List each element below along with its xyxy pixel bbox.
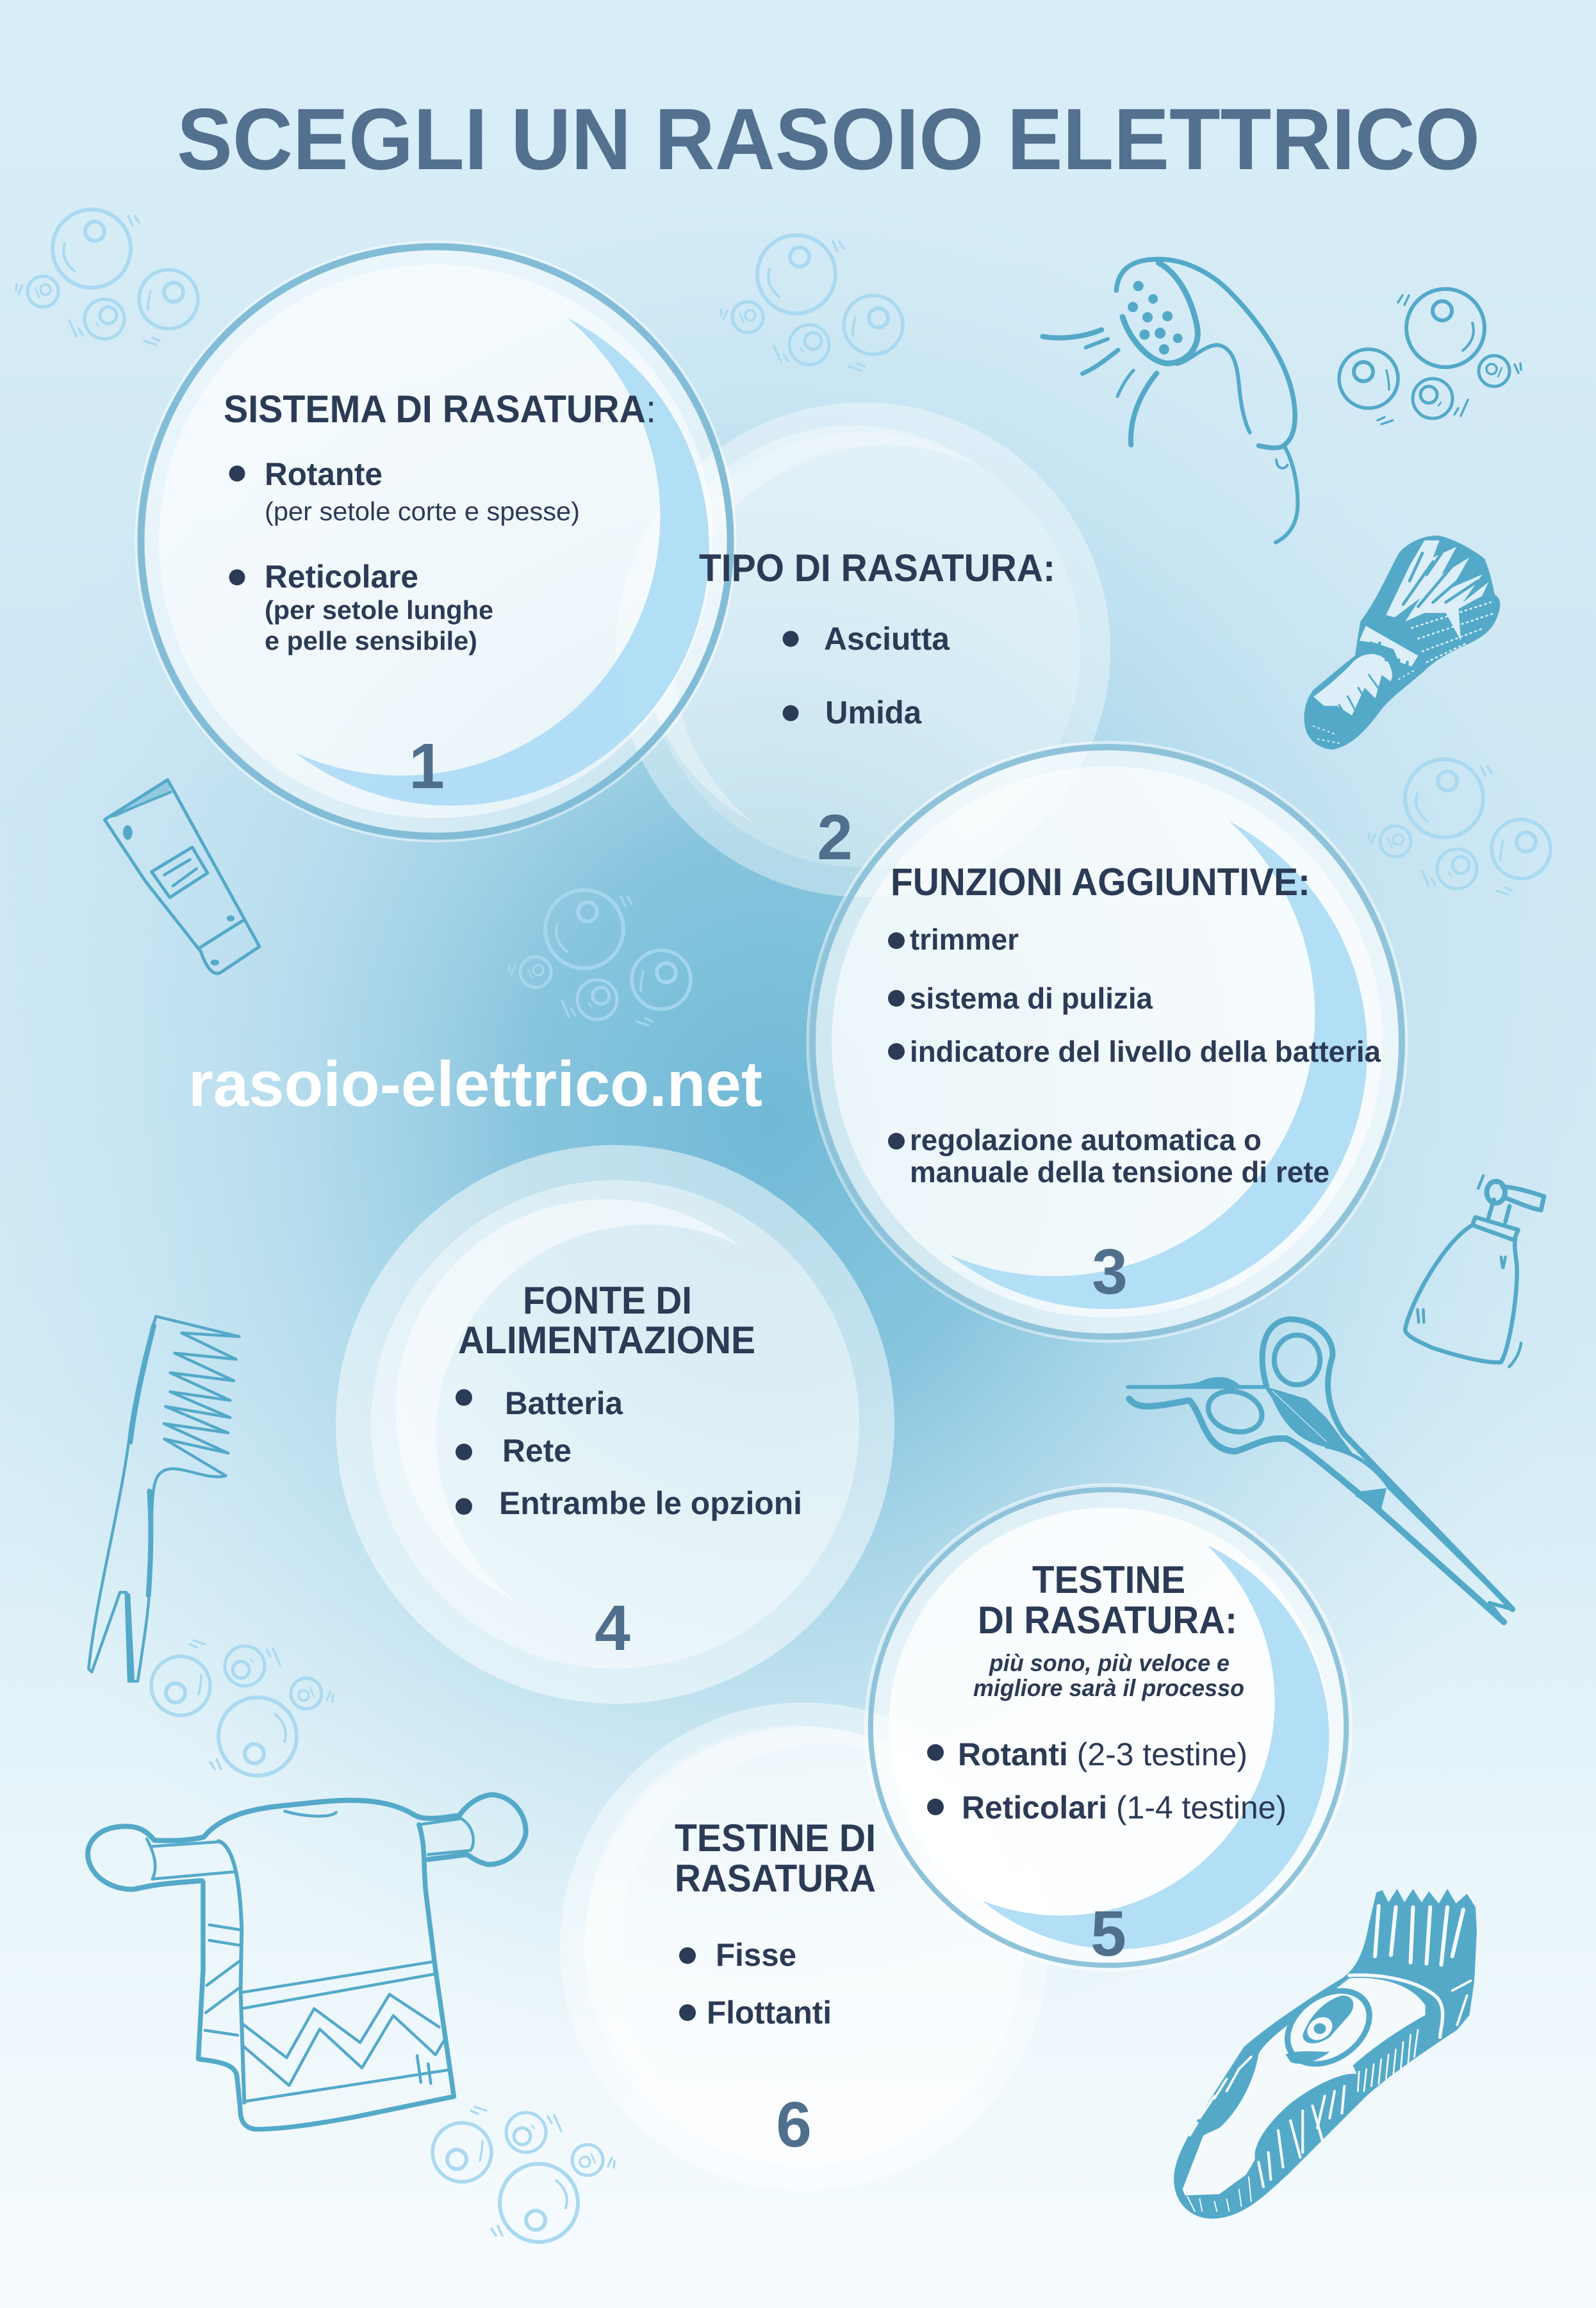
panel 2 text: Asciutta	[824, 621, 950, 657]
panel 1 text: 1	[409, 730, 445, 802]
panel 6 text: 6	[776, 2089, 812, 2161]
panel 3 text: FUNZIONI AGGIUNTIVE:	[891, 861, 1310, 903]
panel 5 text: Reticolari (1-4 testine)	[962, 1790, 1287, 1826]
panel 2 text: 2	[817, 802, 853, 873]
panel 1 text: e pelle sensibile)	[265, 626, 477, 655]
bubble panel 6	[560, 1702, 1048, 2191]
panel 5 text: DI RASATURA:	[978, 1599, 1237, 1642]
panel 1 text: SISTEMA DI RASATURA:	[224, 388, 656, 431]
panel 5 text: più sono, più veloce e	[989, 1650, 1230, 1676]
panel 6 text: TESTINE DI	[675, 1817, 876, 1859]
panel 4 text	[456, 1279, 802, 1664]
icon: soap dispenser	[1405, 1176, 1544, 1367]
icon: bubbles top right	[1339, 289, 1521, 424]
bubble panel 2	[616, 402, 1110, 897]
bubble panel 4	[336, 1145, 894, 1704]
panel 3 text: manuale della tensione di rete	[910, 1155, 1329, 1189]
icon: comb	[88, 1316, 239, 1681]
panel 1 text	[224, 388, 656, 802]
bubble panel 3	[807, 742, 1407, 1342]
panel 4 text: Rete	[502, 1433, 572, 1469]
panel 1 text: (per setole lunghe	[265, 595, 493, 625]
panel 6 text: Fisse	[716, 1937, 796, 1973]
panel 5 text: TESTINE	[1032, 1558, 1185, 1601]
icon: electric clipper	[1174, 1889, 1477, 2219]
panel 2 text: Umida	[825, 695, 922, 730]
icon: cream tube	[104, 780, 259, 973]
panel 4 text: FONTE DI	[523, 1279, 692, 1322]
bubble panel 1	[136, 242, 736, 841]
icon: shower head	[1042, 260, 1297, 543]
panel 3 text: regolazione automatica o	[910, 1123, 1262, 1157]
panel 4 text: Entrambe le opzioni	[499, 1485, 802, 1521]
panel 6 text: RASATURA	[675, 1857, 876, 1900]
panel 5 text: migliore sarà il processo	[973, 1675, 1244, 1701]
panel 1 text: Reticolare	[265, 559, 418, 595]
title: SCEGLI UN RASOIO ELETTRICO	[177, 90, 1480, 188]
panel 5 text	[927, 1558, 1287, 1970]
panel 4 text: Batteria	[505, 1385, 623, 1421]
panel 1 text: (per setole corte e spesse)	[265, 497, 580, 526]
panel 6 text: Flottanti	[707, 1995, 832, 2031]
panel 3 text: sistema di pulizia	[910, 982, 1153, 1015]
panel 3 text: trimmer	[910, 923, 1019, 956]
panel 6 text	[675, 1817, 876, 2161]
panel 4 text: ALIMENTAZIONE	[458, 1319, 755, 1362]
panel 3 text	[888, 861, 1381, 1308]
bubble panel 5	[866, 1485, 1351, 1970]
panel 1 text: Rotante	[265, 456, 383, 492]
panel 5 text: Rotanti (2-3 testine)	[958, 1736, 1247, 1772]
panel 2 text: TIPO DI RASATURA:	[699, 547, 1055, 589]
panel 4 text: 4	[595, 1592, 630, 1664]
panel 3 text: 3	[1092, 1236, 1128, 1308]
icon: shaving brush	[1304, 536, 1500, 750]
website label: rasoio-elettrico.net	[188, 1048, 762, 1120]
icon: scissors	[1128, 1319, 1513, 1622]
panel 3 text: indicatore del livello della batteria	[910, 1035, 1381, 1068]
icon: towel on rail	[88, 1795, 526, 2129]
panel 5 text: 5	[1090, 1898, 1126, 1970]
panel 2 text	[699, 547, 1055, 873]
